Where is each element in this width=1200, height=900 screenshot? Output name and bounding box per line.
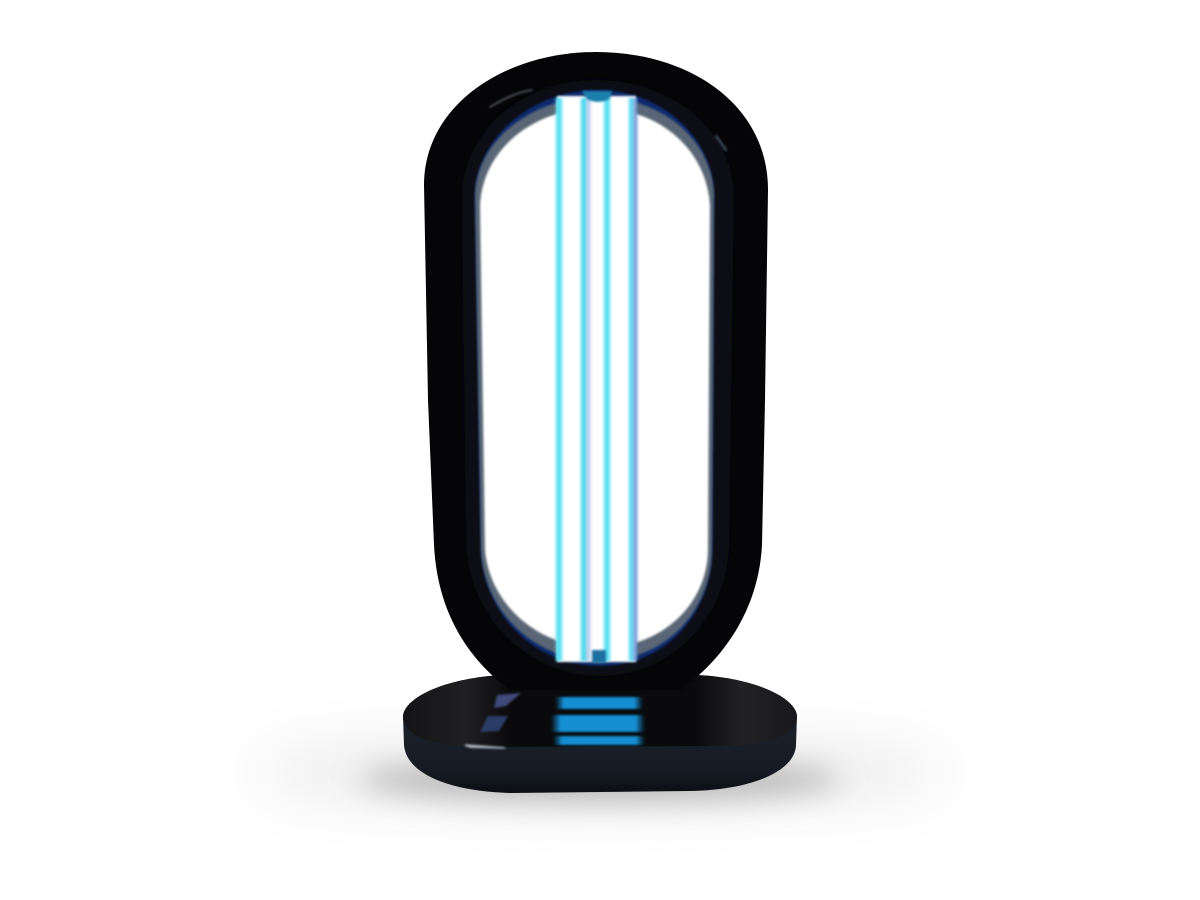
base side wall xyxy=(403,675,797,793)
bottom tube clamp xyxy=(592,650,606,663)
lamp frame ring xyxy=(424,52,768,690)
inner window rim xyxy=(475,90,714,666)
tube shadow centre-left xyxy=(587,98,590,661)
tube edge right xyxy=(629,98,634,661)
floor shadow xyxy=(250,746,950,802)
base blue glow reflection xyxy=(551,697,645,745)
frame glints xyxy=(490,90,726,150)
base top surface xyxy=(403,675,797,747)
lamp base xyxy=(403,675,797,793)
white window xyxy=(480,108,710,648)
tube edge left xyxy=(556,98,562,661)
tube edge centre-right xyxy=(604,98,610,661)
UV tubes xyxy=(556,96,637,662)
tube body xyxy=(557,96,636,662)
top tube clamp xyxy=(582,91,612,102)
inner grey rim xyxy=(475,97,714,661)
tube edge centre-left xyxy=(581,98,587,661)
tube shadow right xyxy=(634,98,637,661)
frame inner bevel xyxy=(462,80,734,676)
base highlight left xyxy=(465,693,521,748)
